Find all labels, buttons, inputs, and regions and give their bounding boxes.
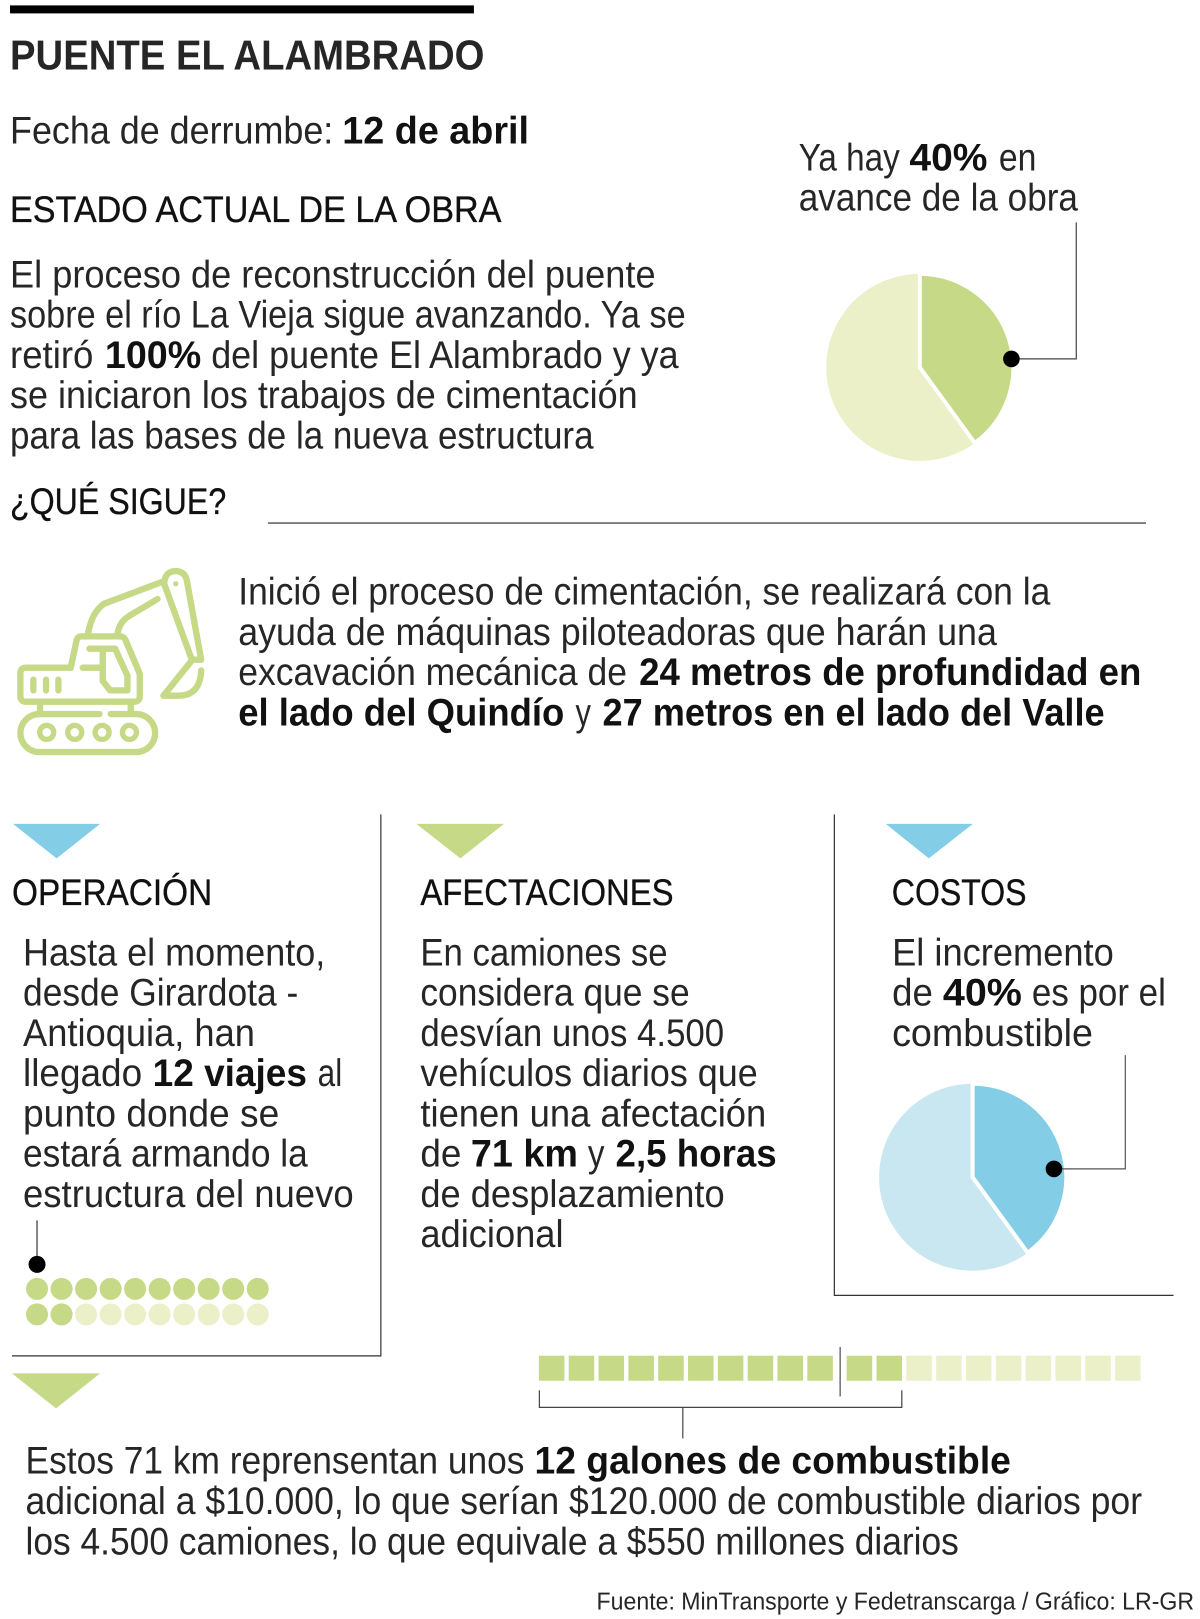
text block: reconstruction status: se iniciaron los trabajos de cimentación bbox=[10, 374, 638, 417]
text block: afectaciones: 2,5 horas bbox=[616, 1133, 777, 1176]
text block: operacion: estructura del nuevo bbox=[23, 1173, 354, 1216]
text block: foundation process: ayuda de máquinas piloteadoras que harán una bbox=[238, 611, 997, 654]
text block: reconstruction status bbox=[10, 253, 686, 457]
text block: operacion: Hasta el momento, bbox=[23, 931, 325, 974]
text block: afectaciones: tienen una afectación bbox=[420, 1092, 766, 1135]
heading: operacion: OPERACIÓN bbox=[12, 872, 212, 913]
text block: operacion: Antioquia, han bbox=[23, 1012, 255, 1055]
text block: afectaciones: desvían unos 4.500 bbox=[420, 1012, 724, 1055]
text block: foundation process: Inició el proceso de cimentación, se realizará con la bbox=[238, 570, 1051, 613]
panel: fuel cost bbox=[12, 1347, 1142, 1563]
text block: operacion: al bbox=[318, 1052, 342, 1095]
text block: foundation process: 27 metros en el lado del Valle bbox=[603, 691, 1105, 734]
heading: que sigue: ¿QUÉ SIGUE? bbox=[10, 481, 226, 522]
square chart: 12 gallons bbox=[539, 1347, 1141, 1438]
text block: reconstruction status: sobre el río La Vieja sigue avanzando. Ya se bbox=[10, 294, 686, 337]
text block: costos: 40% bbox=[943, 972, 1022, 1015]
pie label: 40% progress: avance de la obra bbox=[799, 176, 1078, 219]
text block: afectaciones: En camiones se bbox=[420, 931, 668, 974]
text block: operacion: estará armando la bbox=[23, 1133, 308, 1176]
panel: operacion bbox=[12, 814, 381, 1356]
date of collapse: Fecha de derrumbe: bbox=[10, 109, 333, 152]
pie label: 40% progress: Ya hay bbox=[799, 136, 900, 179]
text block: afectaciones: y bbox=[588, 1133, 605, 1176]
text block: foundation process: el lado del Quindío bbox=[238, 691, 564, 734]
dot chart: 12 trips bbox=[26, 1220, 269, 1325]
text block: operacion: llegado bbox=[23, 1052, 142, 1095]
text block: costos: El incremento bbox=[892, 931, 1114, 974]
text block: fuel cost: adicional a $10.000, lo que serían $120.000 de combustible diarios por bbox=[26, 1480, 1142, 1523]
text block: reconstruction status: El proceso de reconstrucción del puente bbox=[10, 253, 656, 296]
text block: reconstruction status: para las bases de la nueva estructura bbox=[10, 414, 594, 457]
text block: operacion: punto donde se bbox=[23, 1092, 279, 1135]
text block: foundation process: excavación mecánica de bbox=[238, 651, 627, 694]
text block: reconstruction status: retiró bbox=[10, 334, 93, 377]
text block: operacion: 12 viajes bbox=[153, 1052, 307, 1095]
text block: foundation process: y bbox=[576, 691, 592, 734]
title: PUENTE EL ALAMBRADO bbox=[10, 31, 484, 78]
date of collapse: 12 de abril bbox=[342, 109, 529, 152]
pie label: 40% progress: en bbox=[999, 136, 1036, 179]
pie label: 40% progress: 40% bbox=[909, 136, 987, 179]
icon: blue triangle bbox=[886, 824, 973, 858]
text block: reconstruction status: 100% bbox=[105, 334, 201, 377]
text block: costos: de bbox=[892, 972, 933, 1015]
heading: estado actual: ESTADO ACTUAL DE LA OBRA bbox=[10, 189, 502, 230]
text block: afectaciones: considera que se bbox=[420, 972, 690, 1015]
pie chart: project progress bbox=[826, 222, 1076, 461]
date of collapse bbox=[10, 109, 529, 152]
text block: fuel cost bbox=[26, 1440, 1142, 1563]
text block: costos: es por el bbox=[1032, 972, 1166, 1015]
text block: afectaciones: 71 km bbox=[471, 1133, 578, 1176]
text block: foundation process bbox=[238, 570, 1141, 734]
top black bar bbox=[10, 5, 474, 13]
heading: afectaciones: AFECTACIONES bbox=[420, 872, 674, 913]
panel: afectaciones bbox=[416, 824, 777, 1256]
text block: afectaciones bbox=[420, 931, 777, 1256]
text block: operacion: desde Girardota - bbox=[23, 972, 298, 1015]
text block: afectaciones: adicional bbox=[420, 1213, 564, 1256]
text block: afectaciones: de desplazamiento bbox=[420, 1173, 725, 1216]
text block: reconstruction status: del puente El Alambrado y ya bbox=[211, 334, 679, 377]
panel: costos bbox=[834, 814, 1174, 1295]
text block: fuel cost: 12 galones de combustible bbox=[534, 1440, 1011, 1483]
text block: fuel cost: Estos 71 km reprensentan unos bbox=[26, 1440, 524, 1483]
heading: costos: COSTOS bbox=[892, 872, 1027, 913]
text block: operacion bbox=[23, 931, 354, 1216]
icon: green triangle bbox=[416, 824, 504, 858]
icon: green triangle bbox=[12, 1373, 100, 1408]
text block: costos: combustible bbox=[892, 1012, 1093, 1055]
text block: fuel cost: los 4.500 camiones, lo que equivale a $550 millones diarios bbox=[26, 1520, 959, 1563]
icon: blue triangle bbox=[13, 824, 100, 858]
pie label: 40% progress bbox=[799, 136, 1078, 219]
text block: afectaciones: de bbox=[420, 1133, 461, 1176]
pie chart: fuel share of cost increase bbox=[879, 1055, 1125, 1271]
text block: costos bbox=[892, 931, 1166, 1055]
icon: excavator bbox=[20, 571, 201, 752]
text block: afectaciones: vehículos diarios que bbox=[420, 1052, 758, 1095]
text block: foundation process: 24 metros de profundidad en bbox=[639, 651, 1141, 694]
